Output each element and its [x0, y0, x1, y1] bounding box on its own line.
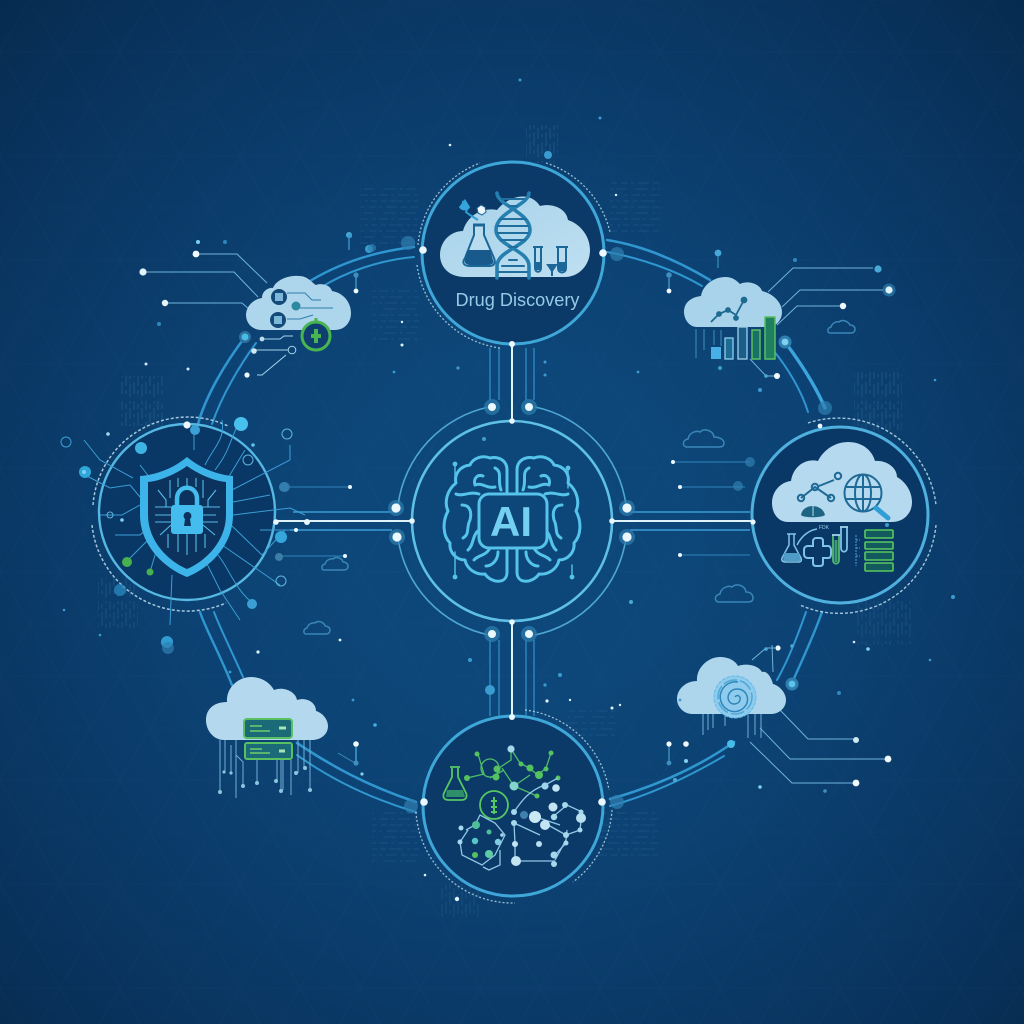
connector lines [750, 268, 883, 376]
icon: green badge [302, 318, 330, 350]
panel: central AI brain hub [412, 421, 633, 621]
icon: green molecule ring [480, 791, 508, 819]
data texture fields [98, 125, 912, 921]
panel: cloud analytics right [752, 418, 936, 613]
cloud [440, 196, 590, 277]
connector lines [750, 645, 885, 783]
dashed halo [800, 418, 936, 613]
cloud [677, 657, 786, 714]
bar chart [696, 317, 775, 359]
data drip lines [220, 740, 310, 798]
cloud [206, 677, 328, 740]
cloud [246, 276, 351, 330]
dotted halo [416, 710, 612, 903]
outer network ring [198, 240, 825, 812]
circuit nodes [61, 417, 292, 648]
icon: DNA helix [496, 193, 530, 278]
panel: cloud with servers bottom-left [206, 677, 377, 798]
icon: globe with magnifier [844, 474, 888, 518]
drug discovery label: Drug Discovery [456, 290, 580, 310]
drip nodes [218, 766, 312, 794]
panel: cloud with bar chart top-right [666, 250, 896, 379]
icon: server rack [244, 719, 292, 759]
label: fine print: FDK [819, 525, 830, 531]
icon: lab flask and cross [782, 529, 831, 566]
panel: drug discovery [417, 162, 610, 348]
circuit traces [84, 420, 330, 625]
scattered particles [63, 78, 955, 901]
small cloud outlines [304, 321, 855, 634]
data drip lines [703, 714, 761, 738]
junction nodes [162, 236, 832, 813]
AI chip [479, 494, 547, 548]
panel: cloud with fingerprint bottom-right [666, 641, 891, 793]
brain node dots [453, 437, 633, 604]
cloud [684, 277, 782, 327]
icon: test tubes [832, 527, 860, 566]
hub outer ring [398, 407, 626, 635]
icon: green flask [443, 767, 467, 800]
icon: padlock [171, 488, 203, 534]
shield circuit [155, 478, 220, 555]
dotted halo [417, 163, 610, 348]
panel: cloud with circuits top-left [139, 232, 373, 378]
icon: network graph [798, 473, 841, 517]
icon: server stack [865, 530, 893, 571]
pale molecule network [460, 778, 582, 870]
outer nodes [666, 250, 896, 379]
pale nodes [458, 745, 586, 867]
nearby nodes [338, 723, 377, 776]
green nodes [464, 750, 560, 798]
spokes connecting hub to outer nodes [275, 344, 753, 717]
green molecule chain [467, 749, 551, 796]
icon: flask [459, 199, 495, 266]
cloud [772, 442, 912, 522]
connector lines [143, 254, 267, 310]
icon: brain [444, 457, 580, 581]
dashed halo [92, 417, 228, 611]
icon: test tubes [533, 247, 568, 276]
icon: fingerprint spiral [714, 676, 756, 718]
panel: security shield [61, 417, 330, 648]
icon: chips [270, 289, 333, 328]
AI label: AI [490, 498, 532, 545]
panel: molecules [416, 710, 612, 903]
outer nodes [666, 641, 891, 793]
icon: shield [140, 457, 233, 577]
small circuit below [254, 336, 296, 375]
outer nodes [139, 232, 373, 378]
icon: trend line [711, 298, 746, 322]
